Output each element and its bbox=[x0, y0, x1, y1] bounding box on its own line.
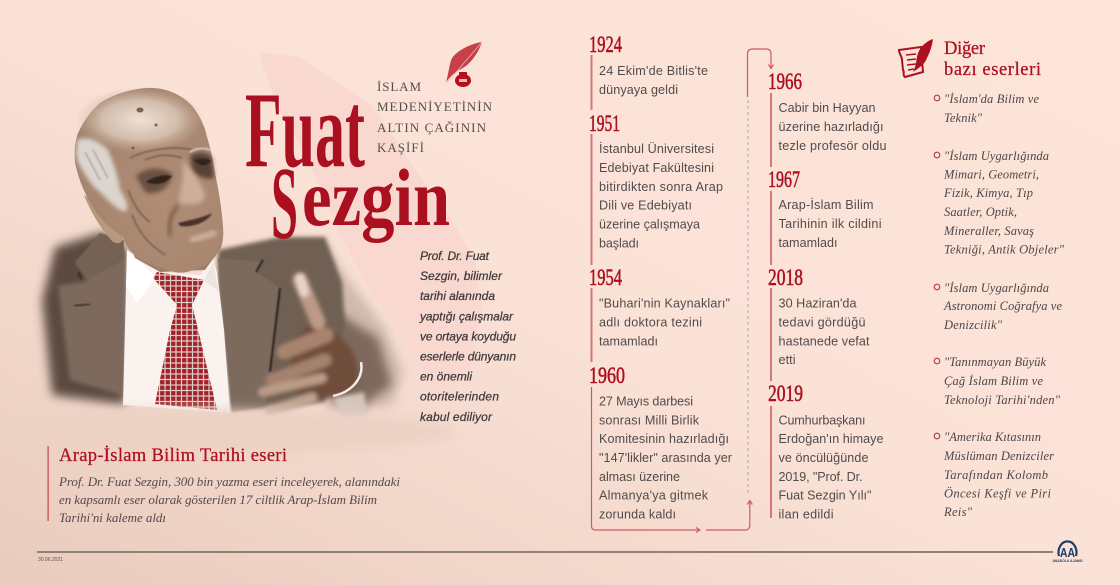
list: other works: Reis" bbox=[943, 505, 973, 519]
crown highlight bbox=[76, 87, 204, 153]
logo: Anadolu Ajansi bbox=[1052, 541, 1082, 563]
intro text: yaptığı çalışmalar bbox=[419, 310, 514, 324]
timeline column 2: Arap-İslam Bilim bbox=[778, 198, 874, 212]
list: other works: "İslam Uygarlığında bbox=[944, 281, 1049, 295]
title bbox=[245, 71, 450, 261]
timeline column 1: 1951 bbox=[589, 111, 620, 136]
list: other works: Saatler, Optik, bbox=[944, 205, 1017, 219]
timeline column 2: üzerine hazırladığı bbox=[778, 120, 884, 134]
timeline column 2: Cabir bin Hayyan bbox=[778, 101, 876, 115]
head bbox=[75, 88, 223, 273]
heading: other works: Diğer bbox=[944, 39, 985, 59]
jacket left side bbox=[42, 232, 127, 405]
subtitle: KAŞİFİ bbox=[377, 140, 424, 155]
timeline column 2: 2018 bbox=[768, 265, 803, 290]
timeline column 1: 24 Ekim'de Bitlis'te bbox=[599, 64, 708, 78]
panel: book: Tarihi'ni kaleme aldı bbox=[59, 510, 166, 525]
timeline column 2: 1967 bbox=[768, 167, 800, 192]
list: other works: Tarafından Kolomb bbox=[944, 468, 1048, 482]
panel: book: en kapsamlı eser olarak gösterilen 17 ciltlik Arap-İslam Bilim bbox=[59, 492, 377, 507]
tie bbox=[153, 272, 217, 410]
bottom fade bbox=[0, 410, 455, 454]
timeline column 2: tezle profesör oldu bbox=[778, 139, 886, 153]
mouth bbox=[178, 213, 212, 226]
timeline column 2: ilan edildi bbox=[778, 508, 834, 522]
timeline column 1: adlı doktora tezini bbox=[599, 316, 702, 330]
timeline column 2: 2019, "Prof. Dr. bbox=[778, 470, 862, 484]
timeline column 1 bbox=[589, 32, 732, 522]
hair bbox=[76, 138, 127, 212]
list: other works: Teknik" bbox=[944, 111, 983, 125]
timeline column 1: tamamladı bbox=[599, 334, 658, 348]
heading: other works: bazı eserleri bbox=[944, 60, 1041, 80]
list: other works: Öncesi Keşfi ve Piri bbox=[944, 486, 1052, 500]
intro text: eserlerle dünyanın bbox=[420, 350, 516, 364]
timeline column 2: tedavi gördüğü bbox=[778, 316, 866, 330]
timeline column 2: 1966 bbox=[768, 69, 802, 94]
timeline column 2: etti bbox=[778, 353, 796, 367]
intro text: tarihi alanında bbox=[420, 289, 495, 303]
title: Fuat bbox=[245, 71, 365, 190]
list: other works: Fizik, Kimya, Tıp bbox=[943, 186, 1033, 200]
list: other works: Çağ İslam Bilim ve bbox=[944, 374, 1043, 388]
list: other works: Mineraller, Savaş bbox=[943, 224, 1034, 238]
arrow: timeline connector bbox=[592, 49, 774, 532]
timeline column 2: Cumhurbaşkanı bbox=[778, 414, 866, 428]
age spots bbox=[132, 108, 158, 150]
subtitle: İSLAM bbox=[377, 79, 421, 94]
intro text: otoritelerinden bbox=[420, 390, 499, 404]
timeline column 2: 2019 bbox=[768, 381, 803, 406]
timeline column 1: 1960 bbox=[589, 363, 625, 388]
intro text: ve ortaya koyduğu bbox=[420, 330, 516, 344]
panel: book: Arap-İslam Bilim Tarihi eseri bbox=[59, 445, 287, 466]
timeline column 1: Dili ve Edebiyatı bbox=[599, 198, 692, 212]
timeline column 2: hastanede vefat bbox=[778, 334, 870, 348]
timeline column 2 bbox=[768, 69, 886, 522]
timeline column 1: "147'likler" arasında yer bbox=[599, 451, 732, 465]
portrait photo bbox=[0, 87, 455, 454]
sleeve haze bbox=[300, 237, 403, 412]
list: other works: "Tanınmayan Büyük bbox=[944, 355, 1046, 369]
shirt cuff bbox=[333, 362, 361, 396]
timeline column 2: 30 Haziran'da bbox=[778, 296, 856, 310]
intro text: en önemli bbox=[420, 370, 472, 384]
list: other works bbox=[934, 92, 1065, 519]
timeline column 1: dünyaya geldi bbox=[599, 83, 678, 97]
hand bbox=[263, 278, 358, 411]
timeline column 1: başladı bbox=[599, 236, 639, 250]
wrinkles bbox=[128, 148, 195, 255]
logo: Anadolu Ajansi: AA bbox=[1060, 545, 1075, 560]
timeline column 1: İstanbul Üniversitesi bbox=[599, 142, 714, 156]
timeline column 2: ve öncülüğünde bbox=[778, 451, 868, 465]
list: other works: "Amerika Kıtasının bbox=[944, 430, 1041, 444]
panel: book bbox=[48, 445, 400, 525]
logo: Anadolu Ajansi: ANADOLU AJANSI bbox=[1052, 558, 1082, 563]
timeline column 2: Fuat Sezgin Yılı" bbox=[778, 488, 872, 502]
list: other works: Müslüman Denizciler bbox=[943, 449, 1054, 463]
list: other works: Astronomi Coğrafya ve bbox=[943, 299, 1062, 313]
list: other works: "İslam'da Bilim ve bbox=[944, 92, 1039, 106]
intro text: Sezgin, bilimler bbox=[420, 269, 503, 283]
list: other works: Mimari, Geometri, bbox=[943, 168, 1039, 182]
timeline column 1: 1954 bbox=[589, 265, 622, 290]
timeline column 1: alması üzerine bbox=[599, 470, 680, 484]
timeline column 1: sonrası Milli Birlik bbox=[599, 414, 700, 428]
timeline column 1: 27 Mayıs darbesi bbox=[599, 394, 693, 408]
list: other works: "İslam Uygarlığında bbox=[944, 149, 1049, 163]
intro text bbox=[419, 249, 516, 424]
timeline column 2: Tarihinin ilk cildini bbox=[778, 217, 882, 231]
brush stroke bbox=[258, 52, 482, 402]
footer rule and date: 30.06.2021 bbox=[38, 557, 63, 563]
icon: scroll and quill bbox=[899, 39, 933, 77]
timeline column 2: Erdoğan'ın himaye bbox=[778, 432, 884, 446]
heading: other works bbox=[944, 39, 1041, 80]
timeline column 1: Almanya'ya gitmek bbox=[599, 488, 709, 502]
panel: book: Prof. Dr. Fuat Sezgin, 300 bin yazma eseri inceleyerek, alanındaki bbox=[58, 474, 400, 489]
chin highlight bbox=[190, 232, 216, 240]
title: ezgin bbox=[302, 152, 450, 243]
brow and eyes bbox=[136, 169, 172, 193]
intro text: kabul ediliyor bbox=[420, 410, 493, 424]
timeline column 1: zorunda kaldı bbox=[599, 508, 676, 522]
shirt bbox=[123, 250, 230, 413]
subtitle: MEDENİYETİNİN bbox=[377, 99, 493, 114]
timeline column 2: tamamladı bbox=[778, 236, 838, 250]
subtitle bbox=[377, 79, 493, 155]
list: other works: Teknoloji Tarihi'nden" bbox=[944, 393, 1061, 407]
ear bbox=[84, 195, 123, 243]
list: other works: Denizcilik" bbox=[943, 318, 1003, 332]
timeline column 1: bitirdikten sonra Arap bbox=[599, 180, 723, 194]
timeline column 1: üzerine çalışmaya bbox=[599, 218, 700, 232]
neck bbox=[125, 232, 218, 272]
feather and inkwell icon bbox=[446, 42, 482, 87]
list: other works: Tekniği, Antik Objeler" bbox=[944, 242, 1065, 256]
jacket right side bbox=[218, 237, 345, 412]
timeline column 1: Komitesinin hazırladığı bbox=[599, 432, 729, 446]
nose bbox=[179, 160, 205, 204]
timeline column 1: Edebiyat Fakültesini bbox=[599, 161, 714, 175]
timeline column 1: "Buhari'nin Kaynakları" bbox=[599, 296, 730, 310]
timeline column 1: 1924 bbox=[589, 32, 622, 57]
title: S bbox=[271, 146, 298, 261]
intro text: Prof. Dr. Fuat bbox=[420, 249, 490, 263]
subtitle: ALTIN ÇAĞININ bbox=[377, 120, 487, 135]
